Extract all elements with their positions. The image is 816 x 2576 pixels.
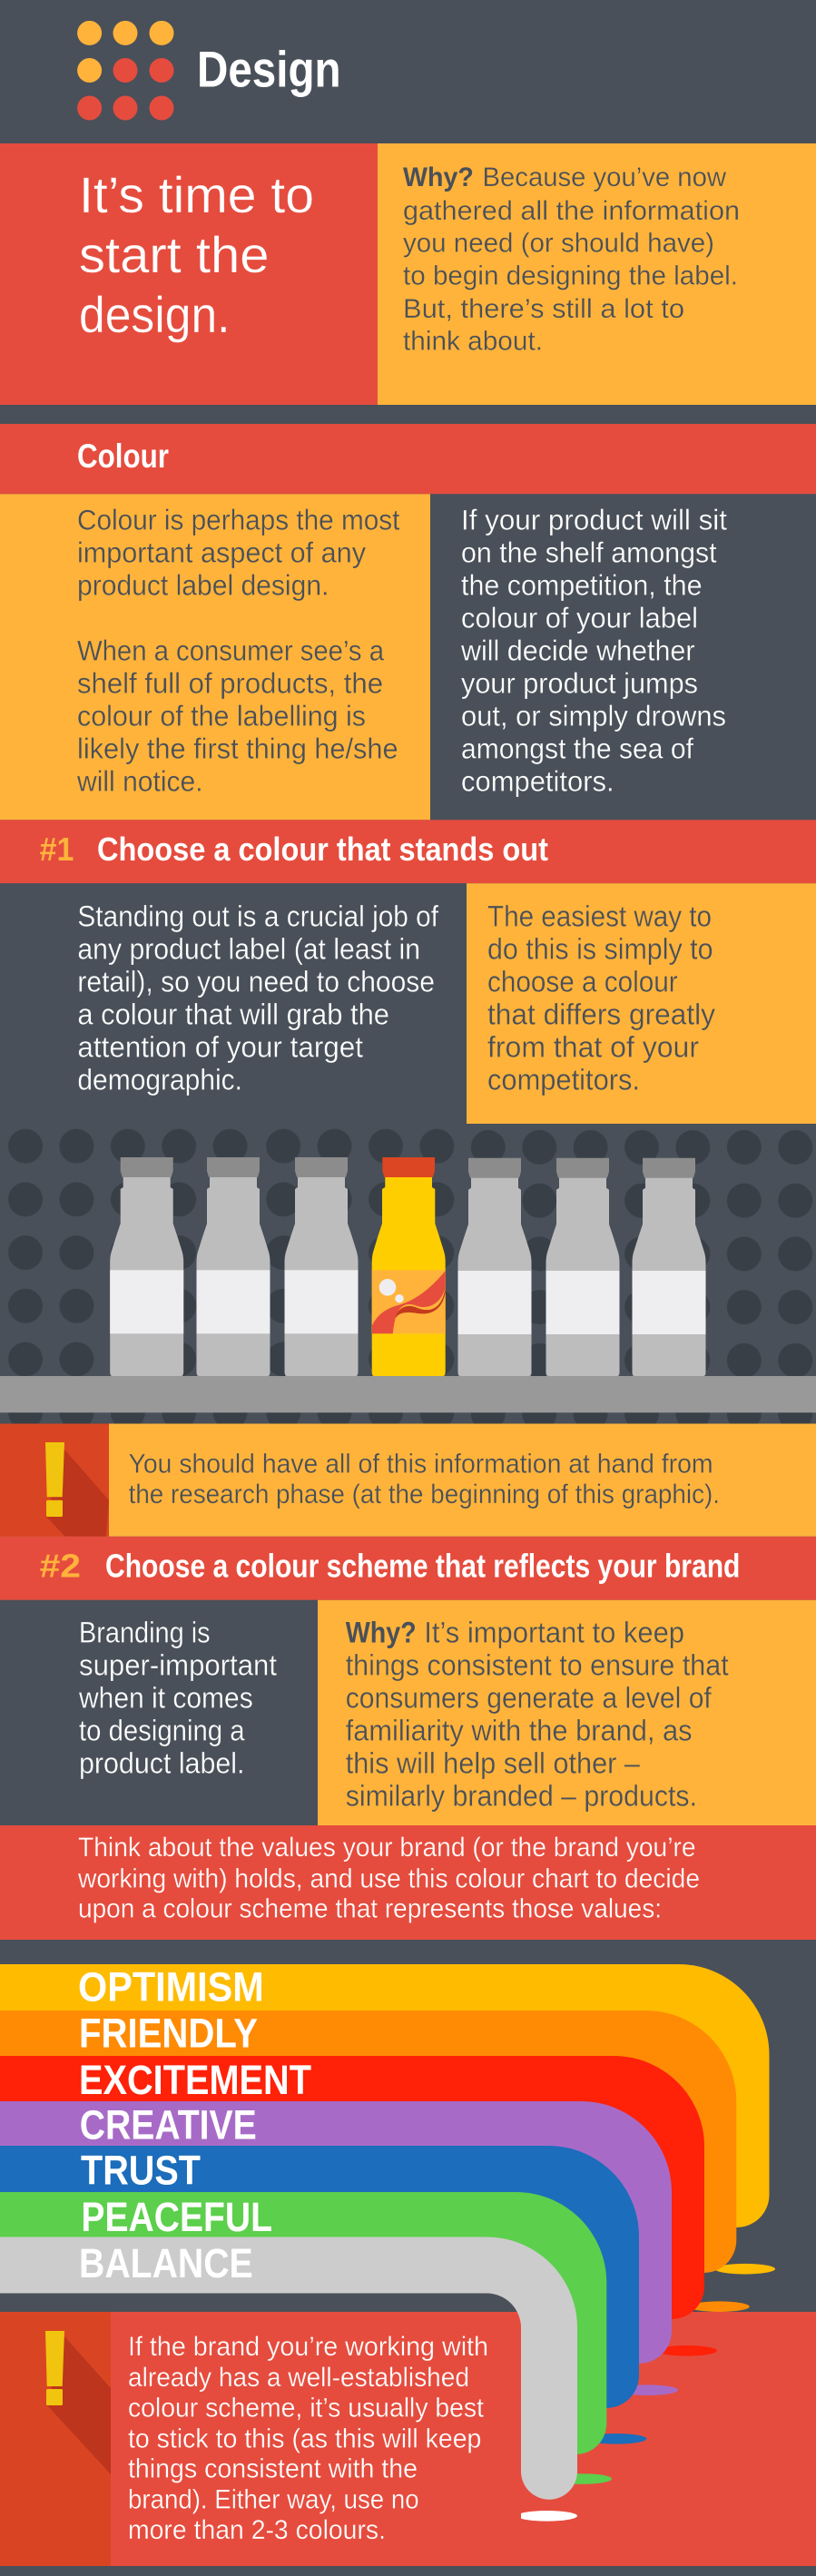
pipe: purple <box>0 2101 672 2364</box>
panel: why consistency text <box>318 1600 816 1825</box>
panel: competition text: the competition, the <box>461 568 703 601</box>
text block: standing out: demographic. <box>77 1064 242 1096</box>
panel: why consistency text: Why? <box>346 1616 417 1648</box>
pipe: orange <box>0 2011 736 2273</box>
chart: colour meanings pipes <box>0 1964 816 2566</box>
label: EXCITEMENT: EXCITEMENT <box>79 2057 311 2103</box>
label: TRUST: TRUST <box>81 2148 201 2194</box>
label: OPTIMISM: OPTIMISM <box>78 1964 264 2010</box>
gap under the grey pipe <box>0 2293 521 2312</box>
text block: standing out: any product label (at least in <box>77 933 420 966</box>
panel: why consistency text: familiarity with the brand, as <box>346 1714 693 1746</box>
heading: Colour: Colour <box>77 438 169 475</box>
bottle: grey 3 <box>285 1157 358 1376</box>
heading: Colour <box>0 424 816 494</box>
bottle: grey 7 <box>632 1158 706 1376</box>
panel: colour importance text: colour of the labelling is <box>77 699 366 732</box>
callout: established colour scheme note: things consistent with the <box>128 2454 418 2483</box>
puddle: white <box>516 2511 577 2522</box>
panel: why intro text: think about. <box>403 327 543 357</box>
panel: competition text: competitors. <box>461 764 614 797</box>
callout: established colour scheme note: to stick to this (as this will keep <box>128 2424 481 2454</box>
panel: competition text: out, or simply drowns <box>461 699 726 732</box>
bottle: yellow standout <box>372 1157 446 1376</box>
panel: easiest way text: The easiest way to <box>487 900 712 933</box>
callout: established colour scheme note: brand). Either way, use no <box>128 2484 419 2514</box>
panel: colour chart intro: Think about the values your brand (or the brand you’re <box>78 1833 696 1863</box>
panel: intro headline: start the <box>79 226 269 283</box>
label: CREATIVE: CREATIVE <box>80 2102 257 2148</box>
panel: easiest way text: that differs greatly <box>487 998 715 1031</box>
heading: #1 choose a colour that stands out: #1 <box>40 831 74 868</box>
text block: standing out <box>0 883 467 1124</box>
puddle: orange <box>689 2301 750 2312</box>
panel: competition text: If your product will sit <box>461 503 727 536</box>
bottle: grey 5 <box>457 1158 532 1376</box>
panel: why consistency text: this will help sell other – <box>346 1746 640 1779</box>
heading: #2 choose a colour scheme that reflects your brand: #2 <box>40 1547 81 1584</box>
text block: branding: Branding is <box>79 1616 211 1648</box>
panel: competition text <box>430 494 816 820</box>
pipe: green <box>0 2192 606 2454</box>
icon: exclamation mark <box>45 2331 111 2474</box>
panel: colour importance text: Colour is perhaps the most <box>77 503 400 536</box>
puddle: green <box>551 2473 612 2484</box>
text block: standing out: a colour that will grab the <box>77 998 389 1031</box>
pipe: red <box>0 2056 704 2319</box>
panel: why consistency text: similarly branded – products. <box>346 1779 697 1812</box>
panel: why intro text: you need (or should have) <box>403 229 714 258</box>
puddle: purple <box>617 2384 678 2395</box>
callout: research phase note <box>0 1423 816 1537</box>
panel: colour importance text: When a consumer see’s a <box>77 634 384 666</box>
puddle: yellow <box>714 2264 775 2275</box>
pipe: blue <box>0 2146 639 2408</box>
text block: branding: super-important <box>79 1648 277 1681</box>
pipe: yellow <box>0 1964 770 2227</box>
panel: why intro text: gathered all the information <box>403 196 740 226</box>
label: BALANCE: BALANCE <box>79 2240 253 2286</box>
panel: why consistency text: It’s important to keep <box>424 1616 684 1648</box>
section icon: nine dots <box>77 21 174 120</box>
text block: standing out: retail), so you need to choose <box>77 966 435 998</box>
panel: why intro text: Because you’ve now <box>483 162 726 192</box>
bottle: grey 1 <box>110 1157 183 1376</box>
panel: competition text: on the shelf amongst <box>461 536 717 568</box>
callout: research phase note: You should have all of this information at hand from <box>129 1450 713 1480</box>
callout: established colour scheme note: If the brand you’re working with <box>128 2332 488 2362</box>
panel: intro headline <box>0 143 378 405</box>
heading: #1 choose a colour that stands out: Choose a colour that stands out <box>97 831 548 868</box>
pipe: grey <box>0 2237 577 2500</box>
panel: colour importance text: important aspect of any <box>77 536 366 568</box>
callout: established colour scheme note <box>0 2312 488 2566</box>
panel: colour importance text <box>0 494 430 820</box>
panel: easiest way text: competitors. <box>487 1064 640 1096</box>
panel: intro headline: design. <box>79 286 231 343</box>
panel: why consistency text: things consistent to ensure that <box>346 1648 729 1681</box>
heading: #2 choose a colour scheme that reflects your brand <box>0 1537 816 1600</box>
title: Design: Design <box>197 40 341 97</box>
text block: standing out: attention of your target <box>77 1031 363 1064</box>
label: PEACEFUL: PEACEFUL <box>81 2194 272 2240</box>
panel: colour chart intro: upon a colour scheme that represents those values: <box>78 1894 662 1924</box>
panel: why intro text: But, there’s still a lot to <box>403 294 684 324</box>
panel: intro headline: It’s time to <box>79 166 314 223</box>
panel: competition text: colour of your label <box>461 601 698 634</box>
panel: why intro text: to begin designing the label. <box>403 261 738 291</box>
text block: branding: to designing a <box>79 1714 245 1746</box>
panel: colour chart intro: working with) holds, and use this colour chart to decide <box>77 1863 700 1893</box>
panel: competition text: your product jumps <box>461 666 698 699</box>
panel: why intro text <box>378 143 816 405</box>
text block: branding: when it comes <box>78 1681 253 1714</box>
panel: colour importance text: shelf full of products, the <box>77 666 383 699</box>
callout: established colour scheme note: colour scheme, it’s usually best <box>128 2394 485 2424</box>
bottle: grey 2 <box>196 1157 270 1376</box>
text block: branding: product label. <box>79 1746 245 1779</box>
panel: competition text: amongst the sea of <box>461 732 693 764</box>
icon: exclamation mark <box>45 1442 109 1537</box>
text block: branding <box>0 1600 318 1825</box>
panel: easiest way text: do this is simply to <box>487 933 713 966</box>
bottle: grey 6 <box>546 1158 619 1376</box>
callout: established colour scheme note: already has a well-established <box>128 2363 469 2393</box>
panel: why intro text: Why? <box>403 162 474 192</box>
panel: easiest way text: from that of your <box>487 1031 699 1064</box>
text block: standing out: Standing out is a crucial job of <box>77 900 438 933</box>
puddle: blue <box>586 2433 646 2444</box>
callout: established colour scheme note: more than 2-3 colours. <box>128 2515 386 2545</box>
panel: easiest way text <box>467 883 816 1124</box>
panel: colour importance text: product label design. <box>77 568 329 601</box>
panel: colour chart intro <box>0 1825 816 1940</box>
shelf <box>0 1376 816 1412</box>
label: FRIENDLY: FRIENDLY <box>79 2010 258 2057</box>
panel: competition text: will decide whether <box>460 634 695 666</box>
panel: colour importance text: will notice. <box>76 764 203 797</box>
illustration: bottles on a shelf <box>0 1124 816 1423</box>
heading: #1 choose a colour that stands out <box>0 820 816 883</box>
panel: colour importance text: likely the first thing he/she <box>77 732 398 764</box>
panel: easiest way text: choose a colour <box>487 966 678 998</box>
panel: why consistency text: consumers generate a level of <box>346 1681 712 1714</box>
panel: bottom red background <box>0 2312 816 2566</box>
callout: research phase note: the research phase (at the beginning of this graphic). <box>129 1480 720 1509</box>
puddle: red <box>656 2345 717 2356</box>
